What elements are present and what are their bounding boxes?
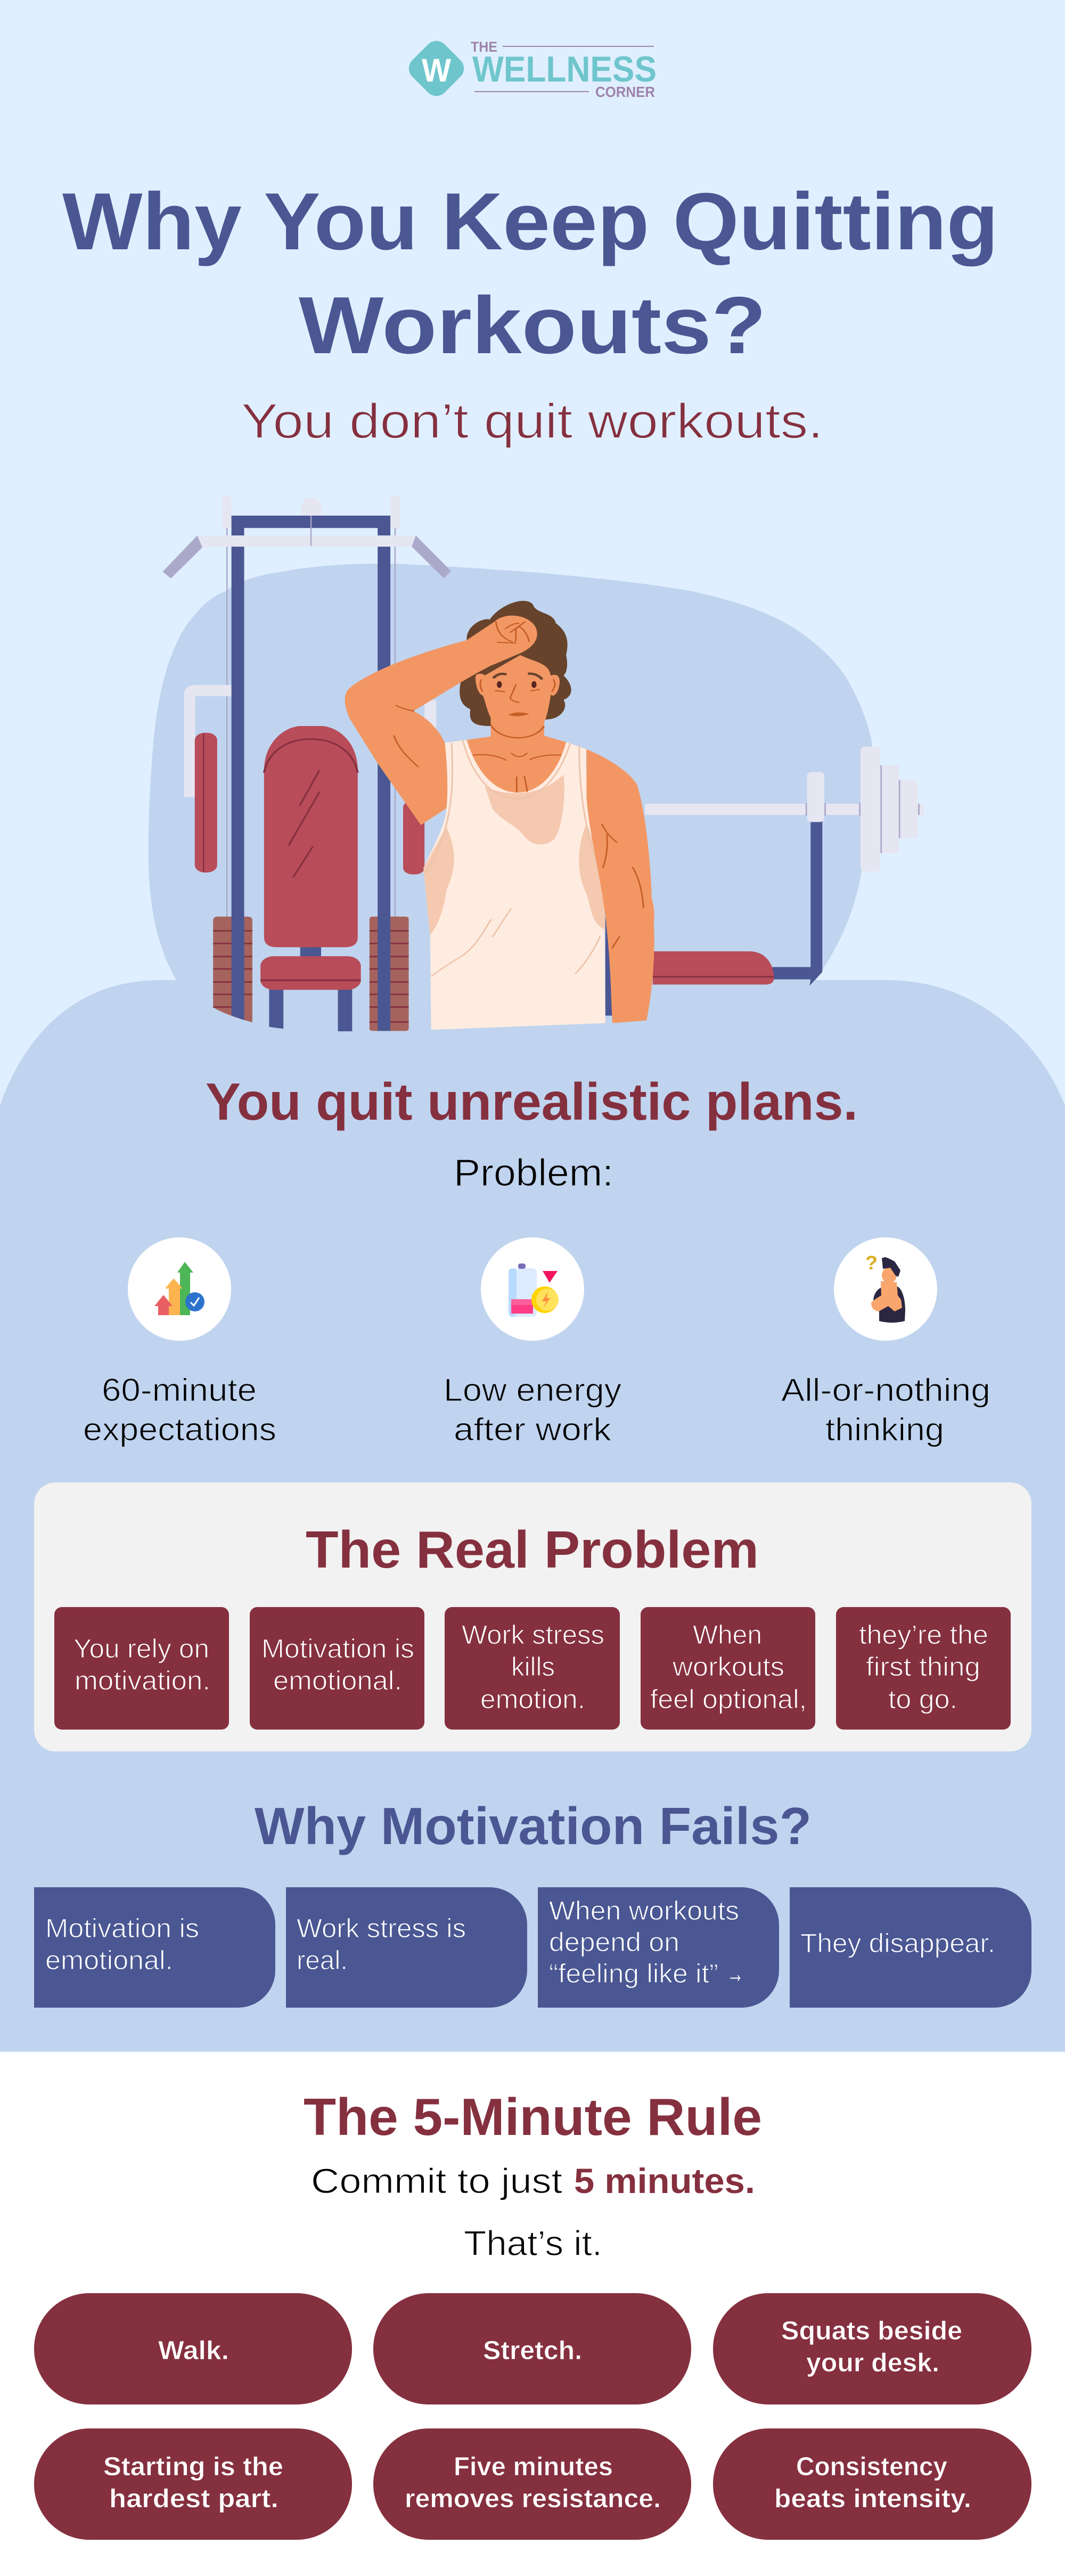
label: 60-minute bbox=[102, 1372, 257, 1408]
lowered arm bbox=[586, 749, 654, 1023]
panel: the real problem bbox=[34, 1482, 1031, 1751]
pill: five minutes removes resistance: Five minutes bbox=[454, 2452, 613, 2481]
logo wordmark bbox=[471, 39, 657, 100]
pill: consistency beats intensity: beats intensity. bbox=[774, 2484, 971, 2513]
commit line: Commit to just bbox=[311, 2161, 562, 2200]
title bbox=[62, 176, 998, 371]
man bbox=[345, 601, 654, 1030]
card: when workouts depend on feeling like it: When workouts bbox=[549, 1896, 739, 1926]
facial features bbox=[473, 674, 561, 793]
logo diamond icon: W bbox=[422, 52, 451, 88]
title: Why You Keep Quitting bbox=[62, 176, 998, 267]
raised arm bbox=[345, 616, 537, 825]
card: they're the first thing to go bbox=[836, 1607, 1011, 1730]
card: motivation is emotional bbox=[250, 1607, 424, 1730]
commit line: 5 minutes. bbox=[574, 2161, 755, 2200]
card: when workouts depend on feeling like it bbox=[538, 1887, 779, 2008]
label: thinking bbox=[825, 1412, 944, 1447]
heading: the 5-minute rule: The 5-Minute Rule bbox=[304, 2088, 762, 2146]
heading: you quit unrealistic plans: You quit unrealistic plans. bbox=[206, 1072, 858, 1131]
card: when workouts depend on feeling like it: “feeling like it” bbox=[549, 1959, 718, 1988]
pill: squats beside your desk: your desk. bbox=[806, 2349, 939, 2377]
card: you rely on motivation: You rely on bbox=[73, 1634, 209, 1664]
card: you rely on motivation bbox=[54, 1607, 229, 1730]
card: motivation is emotional bbox=[34, 1887, 275, 2008]
pill: consistency beats intensity: Consistency bbox=[796, 2452, 947, 2481]
logo: The Wellness Corner bbox=[404, 36, 657, 101]
card: work stress kills emotion: emotion. bbox=[480, 1684, 585, 1714]
pill: five minutes removes resistance bbox=[373, 2428, 691, 2540]
card: work stress is real: real. bbox=[297, 1945, 348, 1975]
label: All-or-nothing bbox=[781, 1372, 990, 1408]
logo diamond icon bbox=[404, 36, 469, 101]
tank top seams bbox=[423, 740, 604, 976]
sweat patches bbox=[423, 775, 605, 935]
card: they're the first thing to go: they’re the bbox=[859, 1620, 988, 1650]
pill: starting is the hardest part: hardest part. bbox=[109, 2484, 278, 2513]
problem label: Problem: bbox=[454, 1152, 613, 1194]
pill: starting is the hardest part bbox=[34, 2428, 352, 2540]
label: after work bbox=[454, 1412, 612, 1447]
background blob bbox=[149, 564, 872, 980]
logo wordmark: THE bbox=[471, 39, 497, 55]
pill: walk bbox=[34, 2293, 352, 2404]
card: when workouts feel optional: When bbox=[693, 1620, 762, 1650]
problem item: 60-minute expectations bbox=[83, 1237, 276, 1447]
illustration: tired man in gym bbox=[149, 495, 924, 1031]
label bbox=[83, 1372, 276, 1447]
heading: The Real Problem bbox=[306, 1520, 759, 1579]
card: when workouts depend on feeling like it: depend on bbox=[549, 1927, 679, 1957]
pill: squats beside your desk bbox=[713, 2293, 1031, 2404]
arm and hand creases bbox=[394, 622, 644, 948]
card: when workouts feel optional: feel optional, bbox=[650, 1684, 807, 1714]
card: work stress is real: Work stress is bbox=[297, 1913, 466, 1943]
title: Workouts? bbox=[299, 280, 766, 371]
card: when workouts feel optional bbox=[641, 1607, 815, 1730]
card: you rely on motivation: motivation. bbox=[75, 1666, 210, 1695]
icon: thinking person bbox=[834, 1237, 937, 1341]
card: work stress kills emotion bbox=[445, 1607, 620, 1730]
label bbox=[781, 1372, 990, 1447]
card: they disappear bbox=[790, 1887, 1031, 2008]
card: work stress is real bbox=[286, 1887, 527, 2008]
label: expectations bbox=[83, 1412, 276, 1447]
pill: stretch: Stretch. bbox=[483, 2336, 582, 2365]
pill: starting is the hardest part: Starting is the bbox=[103, 2452, 283, 2481]
pill: consistency beats intensity bbox=[713, 2428, 1031, 2540]
card: they're the first thing to go: to go. bbox=[888, 1684, 957, 1714]
card: motivation is emotional: Motivation is bbox=[45, 1913, 199, 1943]
neck and chest bbox=[467, 715, 566, 793]
gym machine bbox=[162, 495, 451, 1031]
card: motivation is emotional: emotional. bbox=[45, 1945, 173, 1975]
card: they disappear: They disappear. bbox=[800, 1928, 995, 1958]
hair bbox=[460, 601, 571, 726]
logo wordmark: WELLNESS bbox=[472, 49, 657, 89]
heading: why motivation fails: Why Motivation Fails? bbox=[255, 1797, 812, 1855]
pill: five minutes removes resistance: removes resistance. bbox=[405, 2484, 661, 2513]
icon: low battery with bolt bbox=[481, 1237, 584, 1341]
card: motivation is emotional: Motivation is bbox=[261, 1634, 414, 1664]
that's it line: That’s it. bbox=[464, 2223, 602, 2263]
icon: rising arrows with check bbox=[128, 1237, 231, 1341]
face bbox=[476, 655, 560, 738]
barbell and bench bbox=[605, 747, 924, 1016]
label bbox=[444, 1372, 621, 1447]
commit line bbox=[311, 2161, 755, 2200]
card: when workouts feel optional: workouts bbox=[672, 1652, 784, 1682]
label: Low energy bbox=[444, 1372, 621, 1408]
subtitle: You don’t quit workouts. bbox=[241, 394, 823, 449]
problem item: all-or-nothing thinking bbox=[781, 1237, 990, 1447]
tank top bbox=[423, 740, 605, 1030]
card: work stress kills emotion: Work stress bbox=[462, 1620, 604, 1650]
pill: squats beside your desk: Squats beside bbox=[781, 2317, 962, 2345]
logo wordmark: CORNER bbox=[595, 84, 655, 100]
pill: walk: Walk. bbox=[158, 2336, 229, 2365]
card: work stress kills emotion: kills bbox=[511, 1652, 555, 1682]
problem item: low energy after work bbox=[444, 1237, 621, 1447]
card: when workouts depend on feeling like it: → bbox=[727, 1959, 744, 1988]
pill: stretch bbox=[373, 2293, 691, 2404]
icon: thinking person: ? bbox=[865, 1252, 878, 1274]
card: motivation is emotional: emotional. bbox=[273, 1666, 402, 1695]
card: they're the first thing to go: first thing bbox=[866, 1652, 980, 1682]
